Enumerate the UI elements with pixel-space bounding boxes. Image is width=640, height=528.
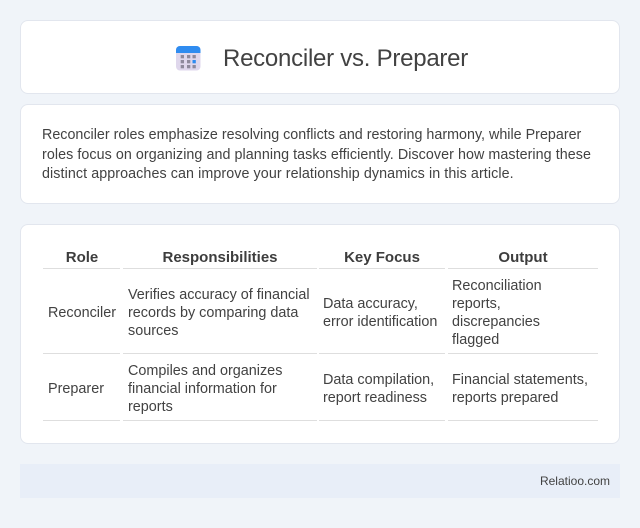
row: Preparer: Compiles and organizes [128, 363, 282, 379]
row: Preparer: Data compilation, [323, 372, 434, 388]
row: Reconciler [48, 278, 542, 348]
row: Reconciler: sources [128, 323, 178, 339]
table header: Responsibilities [162, 249, 278, 266]
row: Preparer: report readiness [323, 390, 427, 406]
title: Reconciler vs. Preparer [223, 45, 468, 72]
row: Reconciler: Reconciliation [452, 278, 542, 294]
row: Reconciler: records by comparing data [128, 305, 298, 321]
row: Preparer [48, 363, 588, 415]
row: Reconciler: flagged [452, 332, 499, 348]
table header: Key Focus [344, 249, 420, 266]
table header [66, 249, 548, 266]
footer credit: Relatioo.com [540, 474, 610, 488]
intro text: Reconciler roles emphasize resolving conflicts and restoring harmony, while Preparer [42, 127, 581, 143]
row: Reconciler: discrepancies [452, 314, 540, 330]
footer bar [20, 464, 620, 498]
icon: calendar [176, 46, 200, 70]
row: Preparer: reports [128, 399, 173, 415]
panel: comparison table card [20, 224, 620, 444]
row: Reconciler: Reconciler [48, 305, 116, 321]
intro text: distinct approaches can improve your relationship dynamics in this article. [42, 166, 514, 182]
row: Preparer: financial information for [128, 381, 277, 397]
row: Reconciler: reports, [452, 296, 501, 312]
row: Reconciler: Verifies accuracy of financial [128, 287, 310, 303]
row: Reconciler: Data accuracy, [323, 296, 418, 312]
table header: Output [498, 249, 548, 266]
row: Preparer: reports prepared [452, 390, 558, 406]
panel: intro text card [20, 104, 620, 204]
panel: title card [20, 20, 620, 94]
row: Preparer: Preparer [48, 381, 104, 397]
intro text [42, 127, 591, 182]
table header: Role [66, 249, 98, 266]
row: Reconciler: error identification [323, 314, 437, 330]
row: Preparer: Financial statements, [452, 372, 588, 388]
intro text: roles focus on organizing and planning tasks efficiently. Discover how mastering these [42, 146, 591, 162]
